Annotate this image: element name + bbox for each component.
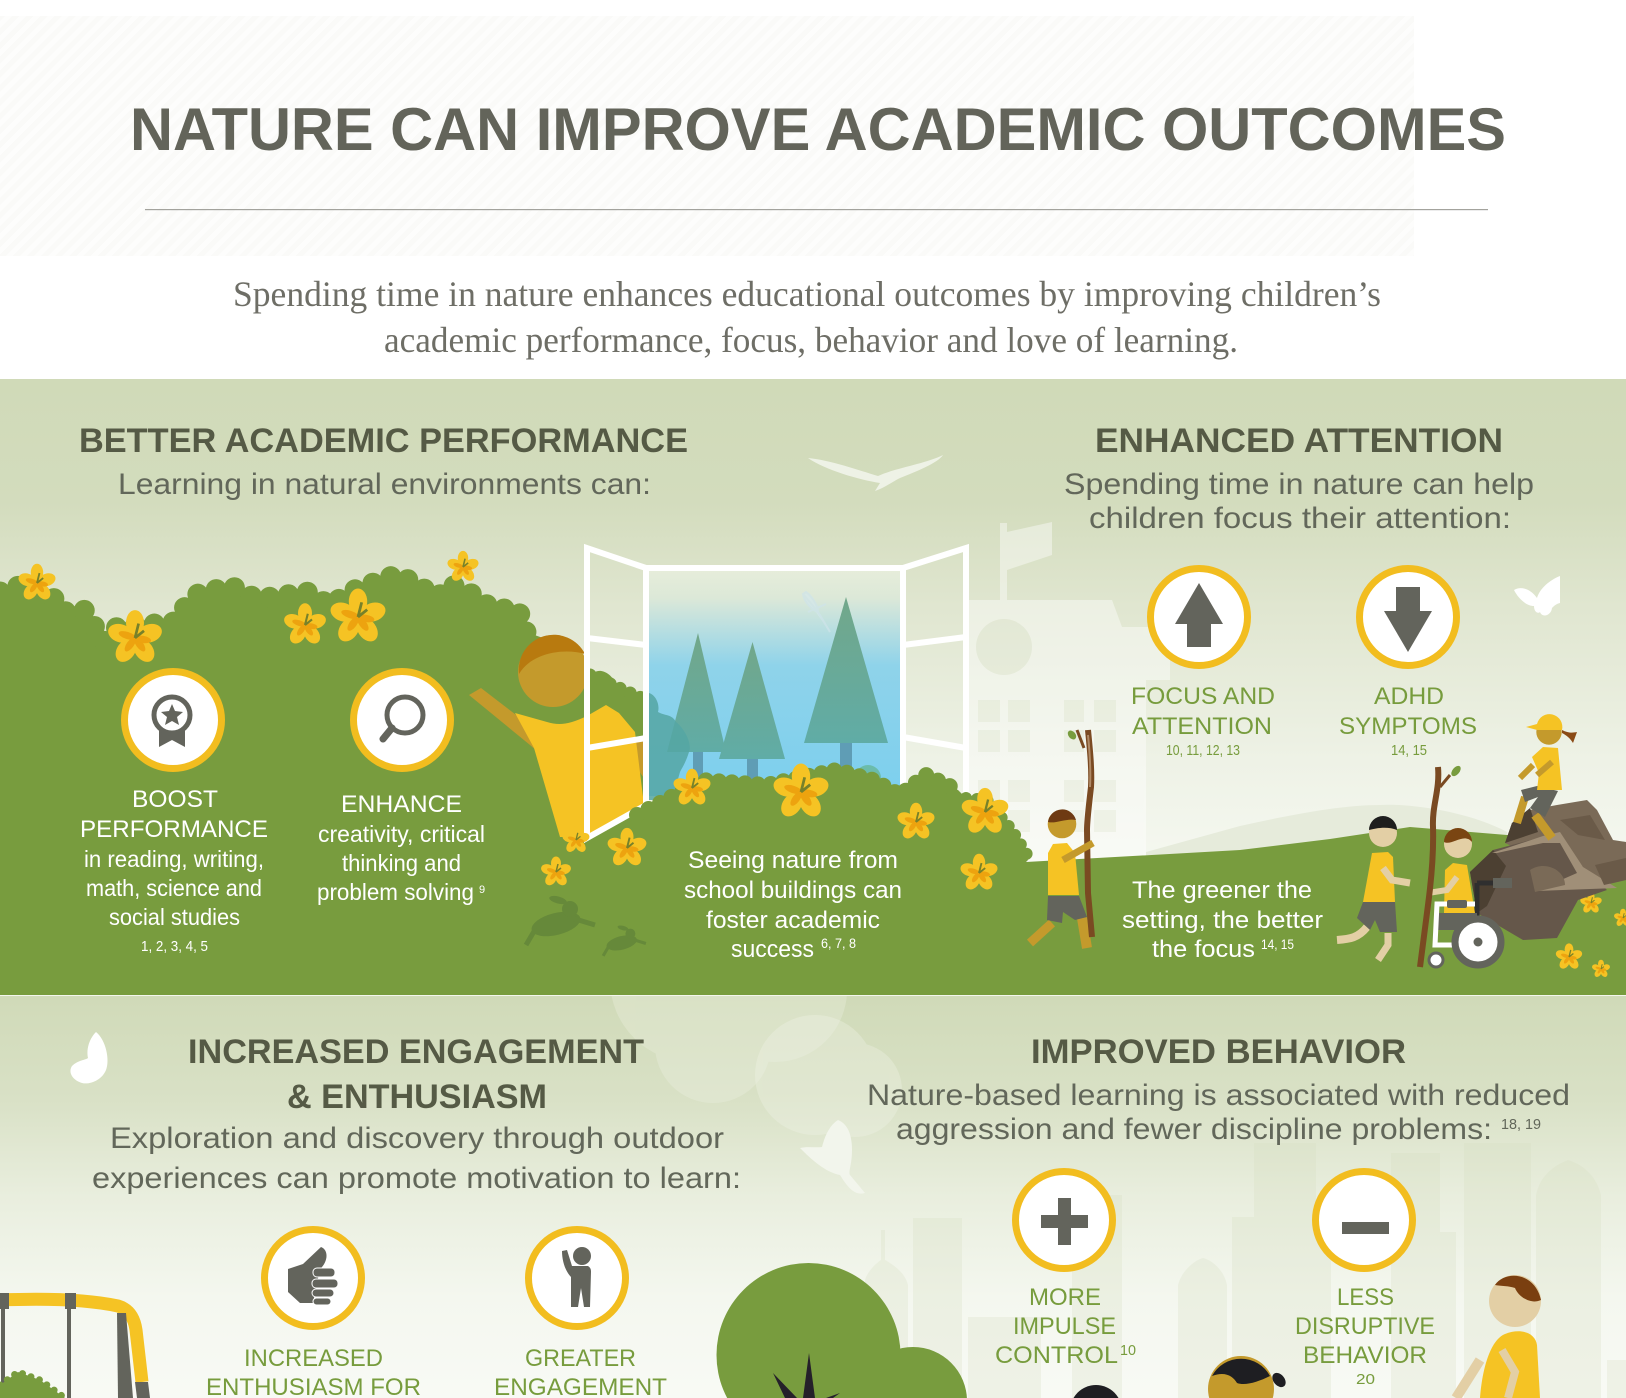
wheels [1455, 919, 1501, 965]
icon: thumbs up [264, 1230, 362, 1326]
heading: increased engagement [188, 1033, 644, 1116]
illustration: bird [800, 1120, 865, 1194]
text: boost performance [80, 786, 268, 955]
walking stick [1087, 730, 1092, 937]
title band background [0, 16, 1414, 256]
icon: magnifier [354, 672, 450, 768]
bush [0, 1372, 65, 1398]
illustration: back bush behind window pane [590, 671, 646, 880]
illustration: butterfly [1514, 576, 1560, 615]
shirt [515, 705, 644, 837]
text: nature-based learning: 18, 19 [1501, 1116, 1541, 1133]
text: boost performance: BOOST [132, 786, 218, 813]
text: the greener the setting: setting, the better [1122, 907, 1323, 934]
text: the greener the setting: 14, 15 [1261, 936, 1294, 952]
text: boost performance: social studies [109, 904, 240, 930]
text: more impulse control: IMPULSE [1013, 1313, 1116, 1340]
text: seeing nature: Seeing nature from [688, 847, 898, 874]
text: the greener the setting [1122, 877, 1323, 963]
text: nature-based learning: Nature-based learning is associated with reduced [867, 1079, 1570, 1112]
tree 1 [667, 633, 726, 792]
text: focus and attention [1131, 683, 1275, 759]
text: boost performance: PERFORMANCE [80, 816, 268, 843]
illustration: window frame [587, 548, 966, 840]
text: more impulse control: 10 [1120, 1342, 1136, 1359]
text: enhance: problem solving [317, 879, 474, 905]
illustration: foreground hedge and ground [500, 770, 1626, 995]
text: adhd symptoms: SYMPTOMS [1339, 713, 1477, 740]
icon: raised-arm person [528, 1230, 626, 1326]
icon: plus [1016, 1172, 1112, 1268]
text: exploration: Exploration and discovery through outdoor [110, 1122, 724, 1155]
text: adhd symptoms: ADHD [1374, 683, 1444, 710]
illustration: child with stick [1030, 729, 1093, 948]
illustration: swing set [0, 1293, 150, 1398]
text: seeing nature: success [731, 936, 814, 963]
illustration: child in wheelchair [1420, 764, 1512, 967]
hair [519, 635, 585, 674]
cloud: back [612, 996, 846, 1103]
panel: lower section background [0, 996, 1626, 1398]
illustration: walking child [1456, 1275, 1541, 1398]
cloud: front [755, 1015, 902, 1137]
illustration: bird [808, 455, 943, 491]
text: boost performance: math, science and [86, 875, 262, 901]
arm [469, 688, 538, 752]
illustration: child at window [469, 635, 644, 837]
text: more impulse control: CONTROL [995, 1342, 1118, 1369]
text: exploration: experiences can promote motivation to learn: [92, 1162, 741, 1195]
text: boost performance: in reading, writing, [84, 846, 264, 872]
text: seeing nature [684, 847, 902, 963]
illustration: boulders [1470, 800, 1626, 940]
icon: medal [124, 672, 222, 768]
illustration: skyline [865, 1143, 1626, 1398]
heading: increased engagement: & ENTHUSIASM [287, 1078, 547, 1116]
panel: upper section background [0, 379, 1626, 995]
text: enhance [317, 791, 485, 905]
text: focus and attention: ATTENTION [1132, 713, 1272, 740]
text: enhance: thinking and [342, 850, 461, 876]
icon: minus [1316, 1172, 1412, 1268]
illustration: child head, ponytail [1208, 1356, 1288, 1398]
text: more impulse control: MORE [1029, 1284, 1101, 1311]
text: the greener the setting: The greener the [1132, 877, 1312, 904]
illustration: window view [649, 571, 901, 800]
text: less disruptive behavior [1295, 1284, 1435, 1388]
text: less disruptive behavior: 20 [1356, 1371, 1375, 1388]
stick [1420, 767, 1438, 967]
text: nature-based learning [867, 1079, 1570, 1146]
text: seeing nature: foster academic [706, 907, 880, 934]
text: enhance: 9 [479, 884, 485, 896]
far arm [612, 735, 644, 778]
text: less disruptive behavior: DISRUPTIVE [1295, 1313, 1435, 1340]
heading: improved behavior: IMPROVED BEHAVIOR [1031, 1033, 1406, 1071]
text: the greener the setting: the focus [1152, 936, 1255, 963]
illustration: tree [716, 1263, 967, 1398]
text: nature-based learning: aggression and fewer discipline problems: [896, 1113, 1492, 1146]
text: greater engagement [494, 1345, 667, 1398]
text: enhance: ENHANCE [341, 791, 462, 818]
illustration: school building [966, 522, 1170, 865]
text: spending time in nature [1064, 468, 1534, 535]
heading: increased engagement: INCREASED ENGAGEMENT [188, 1033, 644, 1071]
heading: enhanced attention: ENHANCED ATTENTION [1095, 422, 1503, 460]
illustration: girl on rock [1517, 714, 1577, 838]
text: increased enthusiasm [206, 1345, 421, 1398]
tree 2 [719, 642, 785, 789]
intro text [233, 274, 1381, 360]
icon: up arrow [1150, 568, 1248, 666]
text: increased enthusiasm: INCREASED [244, 1345, 383, 1372]
tree 3 [804, 597, 888, 783]
text: learning in natural environments: Learning in natural environments can: [118, 468, 651, 501]
text: spending time in nature: Spending time in nature can help [1064, 468, 1534, 501]
illustration: butterfly [70, 1032, 108, 1083]
text: adhd symptoms [1339, 683, 1477, 759]
text: exploration [92, 1122, 741, 1195]
text: focus and attention: 10, 11, 12, 13 [1166, 742, 1240, 759]
text: seeing nature: school buildings can [684, 877, 902, 904]
title: NATURE CAN IMPROVE ACADEMIC OUTCOMES [130, 96, 1506, 163]
text: less disruptive behavior: LESS [1337, 1284, 1394, 1311]
illustration: left hedge [0, 574, 590, 1000]
text: enhance: creativity, critical [318, 821, 485, 847]
text: adhd symptoms: 14, 15 [1391, 742, 1427, 759]
illustration: pale hill [1146, 805, 1507, 860]
text: boost performance: 1, 2, 3, 4, 5 [141, 938, 208, 955]
text: greater engagement: GREATER [525, 1345, 636, 1372]
intro text: Spending time in nature enhances educational outcomes by improving children’s [233, 274, 1381, 314]
text: spending time in nature: children focus their attention: [1089, 502, 1511, 535]
text: less disruptive behavior: BEHAVIOR [1303, 1342, 1427, 1369]
text: seeing nature: 6, 7, 8 [821, 935, 856, 951]
illustration: child head, black hair [1070, 1385, 1122, 1398]
dragonfly [803, 592, 830, 632]
teal bushes [649, 693, 690, 800]
text: focus and attention: FOCUS AND [1131, 683, 1275, 710]
head [518, 637, 588, 707]
text: more impulse control [995, 1284, 1136, 1369]
illustration: boy with stick [1337, 816, 1410, 960]
icon: rabbits [526, 894, 646, 956]
icon: down arrow [1360, 568, 1456, 666]
flowers [17, 551, 1626, 978]
illustration: clouds [612, 996, 902, 1136]
heading: better academic performance: BETTER ACADEMIC PERFORMANCE [79, 422, 688, 460]
intro text: academic performance, focus, behavior and love of learning. [384, 320, 1238, 360]
